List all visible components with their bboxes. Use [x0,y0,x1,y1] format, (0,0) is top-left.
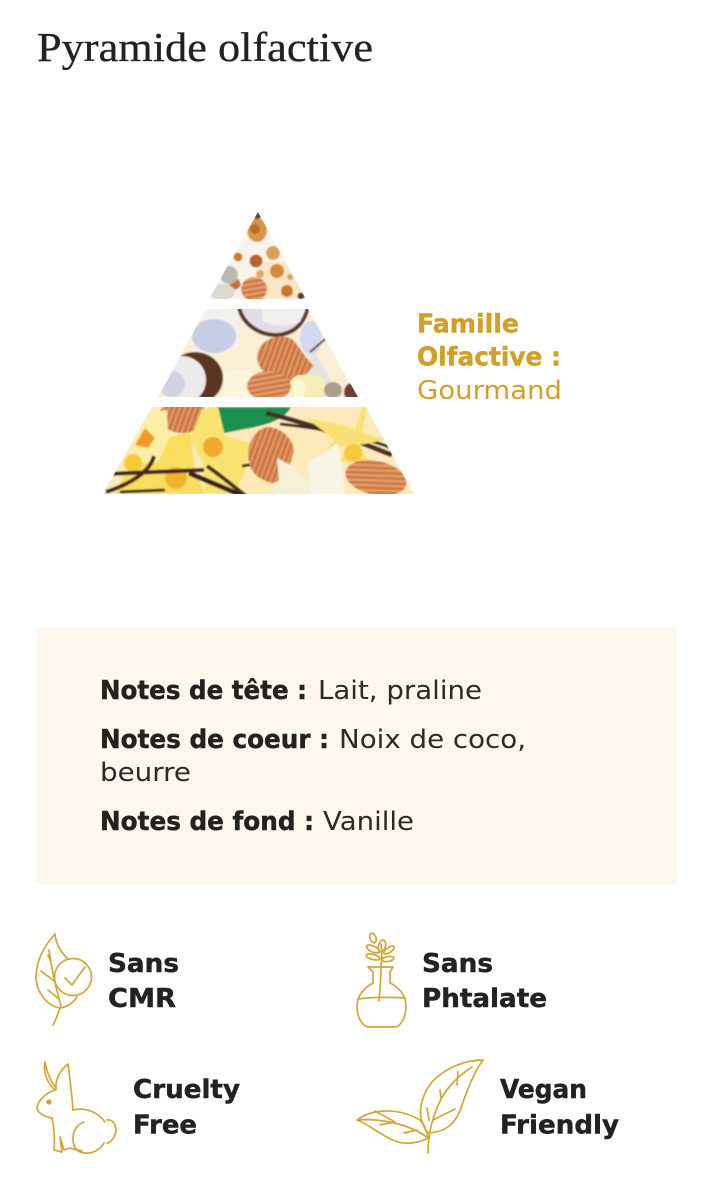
badge: Sans Phtalate [357,932,547,1027]
heart notes text: Noix de coco, [339,725,526,755]
heart notes text [100,725,526,788]
panel: notes [36,627,677,885]
icon: leaf with check [36,934,92,1025]
badge: Sans Phtalate: Sans [422,949,493,979]
top notes text: Lait, praline [318,676,482,706]
badge: Sans CMR: Sans [108,949,179,979]
base notes text: Notes de fond : [100,807,314,837]
heart notes text: beurre [100,758,191,788]
pyramid tier: base notes [103,407,414,494]
top notes text [100,676,482,706]
heart notes text: Notes de coeur : [100,725,329,755]
title: Pyramide olfactive [37,24,373,70]
badge: Sans CMR [36,934,179,1025]
family label: Olfactive : [417,342,561,372]
base notes text: Vanille [323,807,414,837]
badge: Vegan Friendly: Vegan [500,1075,587,1105]
badge: Sans Phtalate: Phtalate [422,984,547,1014]
badge: Sans CMR: CMR [108,984,176,1014]
pyramid tier: heart notes [158,309,358,397]
family label [417,310,562,406]
icon: rabbit [37,1062,116,1153]
badge: Cruelty Free: Free [133,1110,197,1140]
icon: flask with plant [357,932,406,1027]
family label: Gourmand [417,376,562,406]
family label: Famille [417,310,519,340]
badge: Vegan Friendly: Friendly [500,1110,619,1140]
badge: Cruelty Free [37,1062,240,1153]
icon: two leaves [357,1060,483,1153]
top notes text: Notes de tête : [100,676,307,706]
pyramid tier: top notes [209,212,306,299]
badge: Vegan Friendly [357,1060,619,1153]
badge: Cruelty Free: Cruelty [133,1075,240,1105]
pyramid chart [100,210,418,501]
